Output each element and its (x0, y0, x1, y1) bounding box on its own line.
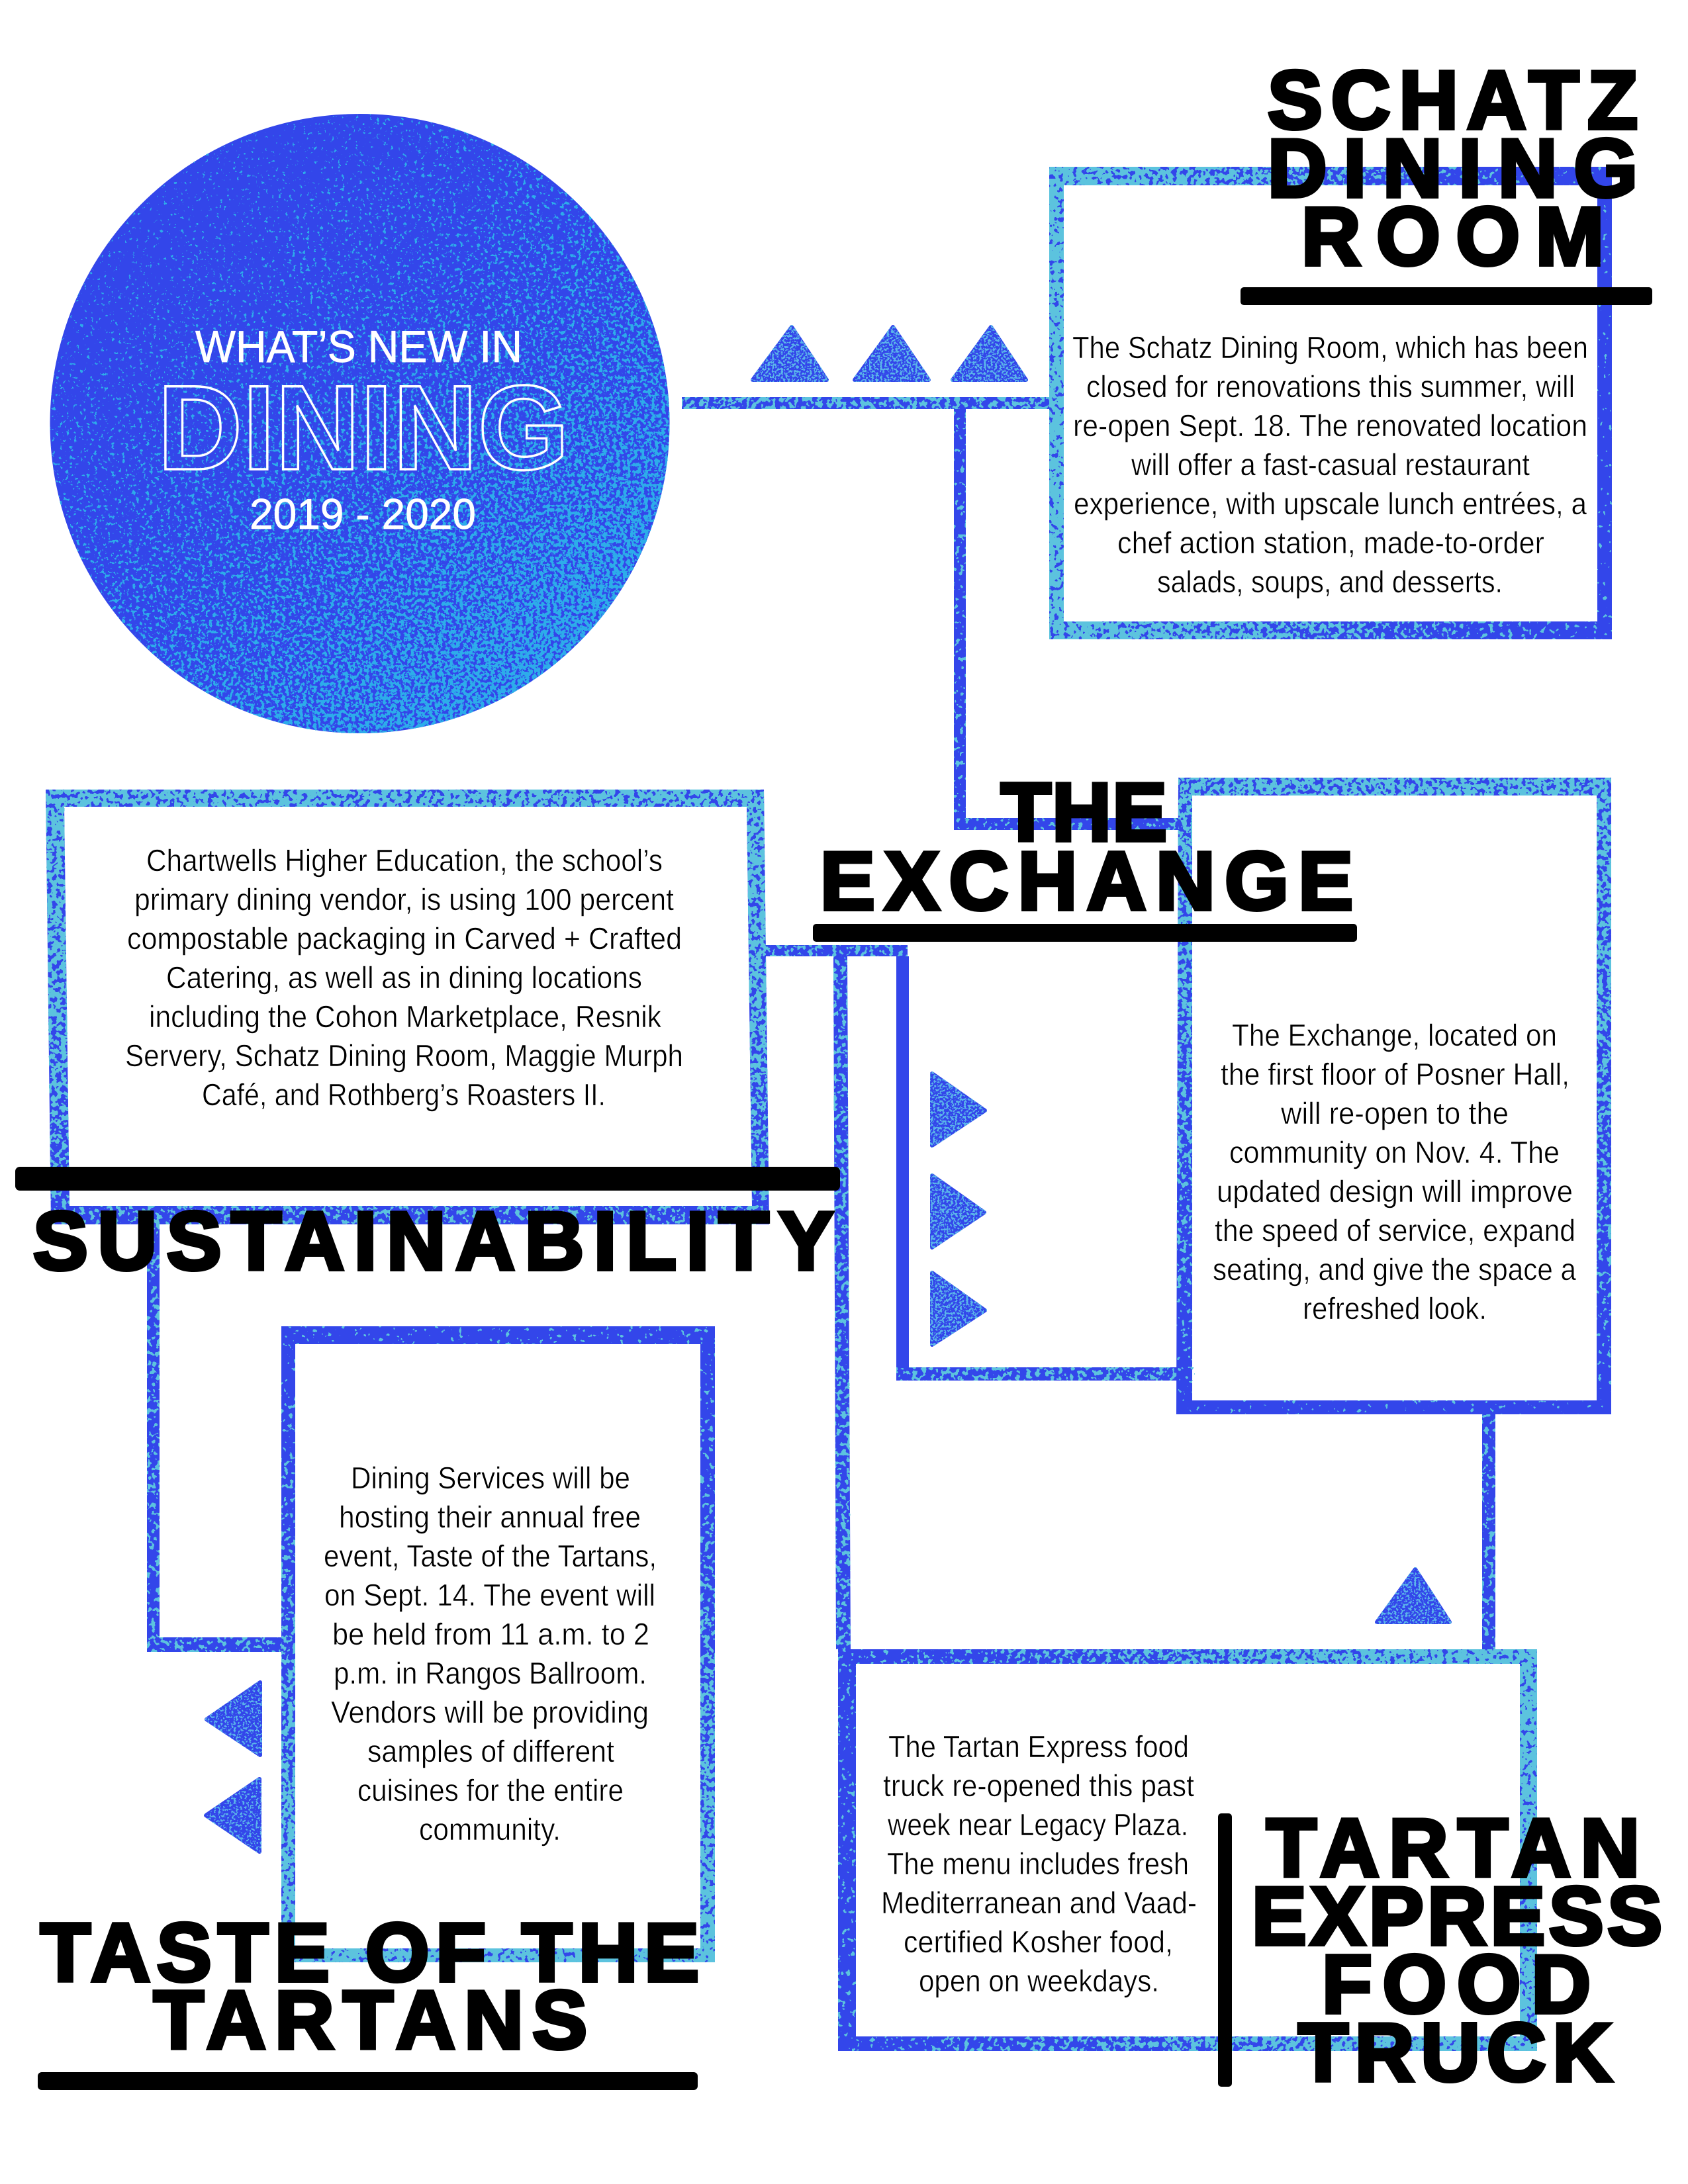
heading: SCHATZ (1268, 55, 1638, 146)
body text: on Sept. 14. The event will (324, 1578, 655, 1612)
heading: DINING (1268, 123, 1638, 214)
triangle arrows: top row (753, 327, 1026, 380)
heading (1252, 1803, 1662, 2099)
body text: certified Kosher food, (904, 1925, 1173, 1959)
body text: Café, and Rothberg’s Roasters II. (202, 1077, 606, 1112)
body text: Dining Services will be (351, 1461, 630, 1495)
title line: years: 2019 - 2020 (250, 490, 476, 538)
body text: compostable packaging in Carved + Crafted (127, 921, 682, 956)
body text: hosting their annual free (339, 1500, 641, 1534)
title circle (50, 114, 670, 733)
heading (1268, 55, 1638, 283)
body text: including the Cohon Marketplace, Resnik (149, 999, 662, 1034)
panel: The Exchange (813, 767, 1611, 1414)
body text: the speed of service, expand (1215, 1213, 1575, 1248)
heading: TRUCK (1298, 2007, 1612, 2099)
heading: TARTANS (154, 1975, 587, 2066)
panel: Taste of the Tartans (38, 1326, 715, 2090)
body text: Servery, Schatz Dining Room, Maggie Murph (125, 1038, 683, 1073)
body text: will offer a fast-casual restaurant (1131, 447, 1530, 482)
connector: Schatz line down to The Exchange (954, 409, 1178, 830)
body text: closed for renovations this summer, will (1086, 369, 1575, 404)
body text: updated design will improve (1217, 1174, 1573, 1208)
connector: Sustainability to Taste of the Tartans (147, 1224, 281, 1652)
body text: event, Taste of the Tartans, (324, 1539, 657, 1573)
body text (324, 1461, 657, 1846)
panel: Sustainability (15, 790, 840, 1287)
triangle arrow: Tartan Express (1377, 1569, 1450, 1622)
body text: week near Legacy Plaza. (887, 1807, 1188, 1842)
connector: The Exchange to Tartan Express (1482, 1414, 1495, 1649)
heading rule (38, 2072, 698, 2090)
body text: The Exchange, located on (1232, 1018, 1557, 1052)
frame (281, 1326, 715, 1962)
panel: Schatz Dining Room (1049, 55, 1652, 639)
body text: truck re-opened this past (883, 1768, 1194, 1803)
body text: Vendors will be providing (331, 1695, 649, 1729)
body text (881, 1729, 1197, 1998)
connector: Sustainability bracket to The Exchange (896, 956, 1195, 1381)
triangle arrows: Taste of the Tartans (206, 1682, 260, 1852)
body text: be held from 11 a.m. to 2 (332, 1617, 649, 1651)
body text: community. (419, 1812, 561, 1846)
body text: Mediterranean and Vaad- (881, 1886, 1197, 1920)
frame (1176, 778, 1611, 1414)
title word: dining outlined: DINING (158, 360, 569, 495)
body text: chef action station, made-to-order (1117, 525, 1544, 560)
body text: The Schatz Dining Room, which has been (1072, 330, 1588, 365)
body text: open on weekdays. (919, 1964, 1159, 1998)
panel: Tartan Express Food Truck (838, 1649, 1662, 2099)
body text: The Tartan Express food (888, 1729, 1189, 1764)
body text: cuisines for the entire (357, 1773, 624, 1807)
heading rule (813, 924, 1357, 942)
heading: EXPRESS (1252, 1871, 1662, 1962)
connector: Sustainability to Tartan Express (764, 945, 908, 1649)
body text: the first floor of Posner Hall, (1221, 1057, 1570, 1091)
body text: community on Nov. 4. The (1229, 1135, 1560, 1169)
body text (125, 843, 683, 1112)
frame (46, 790, 769, 1224)
heading rule (15, 1167, 840, 1191)
body text: will re-open to the (1280, 1096, 1509, 1130)
frame (1049, 167, 1612, 639)
triangle arrows: The Exchange column (932, 1073, 985, 1345)
heading: EXCHANGE (820, 836, 1353, 927)
heading rule: vertical (1218, 1813, 1232, 2087)
body text: Catering, as well as in dining locations (166, 960, 642, 995)
body text (1072, 330, 1588, 599)
heading: TARTAN (1266, 1803, 1640, 1894)
heading: THE (1001, 767, 1167, 858)
body text: experience, with upscale lunch entrées, a (1074, 486, 1587, 521)
body text: primary dining vendor, is using 100 percent (134, 882, 674, 917)
body text: p.m. in Rangos Ballroom. (334, 1656, 647, 1690)
heading: ROOM (1301, 191, 1604, 283)
body text: The menu includes fresh (887, 1846, 1189, 1881)
heading (40, 1907, 699, 2066)
heading (820, 767, 1353, 927)
body text: samples of different (367, 1734, 614, 1768)
body text (1213, 1018, 1576, 1326)
title line: what's new in: WHAT’S NEW IN (195, 322, 522, 372)
body text: Chartwells Higher Education, the school’s (146, 843, 663, 878)
heading: SUSTAINABILITY (33, 1196, 833, 1287)
body text: seating, and give the space a (1213, 1252, 1576, 1287)
body text: salads, soups, and desserts. (1157, 565, 1503, 599)
heading: FOOD (1322, 1939, 1591, 2030)
body text: re-open Sept. 18. The renovated location (1073, 408, 1587, 443)
heading rule (1241, 287, 1652, 305)
heading: TASTE OF THE (40, 1907, 699, 1999)
connector: circle to Schatz (682, 397, 1049, 409)
frame (838, 1649, 1537, 2051)
body text: refreshed look. (1303, 1291, 1487, 1326)
